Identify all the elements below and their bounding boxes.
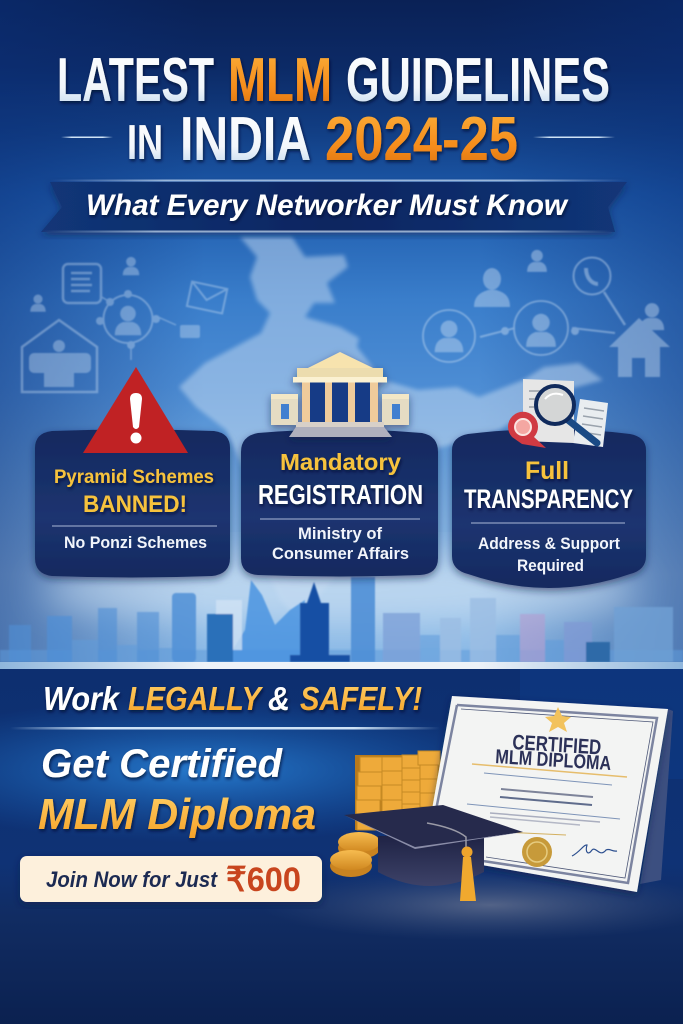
price: ₹600 [226,861,301,899]
panel: pyramid schemes banned [35,367,230,578]
icon: coins [330,832,380,877]
certificate title [495,731,612,775]
title: LATEST [57,46,214,115]
background [0,0,683,668]
icon: connectors [480,328,615,337]
panel: mandatory registration [241,352,438,576]
icon: manager [474,268,510,307]
icon: graduation cap [344,805,523,901]
slogan: SAFELY! [300,680,422,717]
slogan: & [268,680,290,717]
card background [35,430,230,578]
card note: Ministry of [298,524,382,543]
skyline: dark towers [207,582,610,662]
certificate rules [467,764,627,835]
card heading: REGISTRATION [258,479,423,510]
subtitle ribbon [41,180,627,232]
icon: small manager [527,250,547,272]
card heading: Pyramid Schemes [54,467,214,488]
card note [478,534,620,575]
icon: house [609,318,670,377]
title: IN [127,116,163,170]
icon: house with team [22,320,97,392]
icon: envelope [187,282,227,313]
icon: magnifier with documents [508,379,608,448]
skyline: lower haze buildings [0,635,683,662]
card heading: Full [525,457,569,485]
map of India [179,237,603,620]
skyline: pale towers [216,598,673,662]
title: INDIA [180,105,311,174]
card heading: Mandatory [280,449,401,475]
title side rule right [533,136,615,138]
certificate back [640,709,673,884]
icon: star [545,707,571,732]
lower section background [0,662,683,1024]
title side rule left [61,136,113,138]
certificate sheet [424,696,668,892]
icon: parcel [180,325,200,338]
card heading [54,467,214,518]
icon: person in circle [96,290,176,360]
certificate title: MLM DIPLOMA [495,746,612,775]
icon: person behind house [640,303,664,330]
slogan [43,680,422,717]
heading: get certified [38,742,316,839]
tassel [427,823,476,901]
certificate title: CERTIFIED [512,731,602,759]
certificate border [457,705,657,883]
certificate seal [522,837,552,867]
icon: person circle right [514,301,568,355]
card heading: BANNED! [83,491,187,518]
title [57,46,610,174]
icon: far person [30,295,46,312]
price button [20,856,322,902]
slogan: LEGALLY [128,680,264,717]
panel: full transparency [452,379,646,588]
icon: small person [123,257,139,275]
slogan underline [10,727,440,730]
icon: phone circle [574,258,625,325]
card note [272,524,409,563]
certificate [424,696,673,892]
icon: document [63,264,101,303]
card background [241,430,438,576]
title: MLM [228,46,332,115]
title: 2024-25 [325,105,518,174]
faint network icons right [423,250,670,377]
heading: get certified: MLM Diploma [38,790,316,839]
card note: Address & Support [478,534,620,553]
icon: government building [271,352,409,437]
card note: Required [517,556,584,575]
card heading: TRANSPARENCY [464,484,633,514]
icon: person circle left [423,310,475,362]
card note: Consumer Affairs [272,544,409,563]
certificate signature [572,845,617,856]
faint network icons left [22,257,227,392]
card note: No Ponzi Schemes [64,533,207,552]
button text: Join Now for Just [46,867,219,892]
slogan: Work [43,680,121,717]
subtitle text: What Every Networker Must Know [86,189,569,222]
skyline [0,577,683,662]
skyline: mid towers [9,577,375,662]
heading: get certified: Get Certified [41,742,284,786]
card background [452,429,646,588]
card heading [258,449,423,510]
icon: gold stacks [355,751,440,830]
card heading [464,457,633,514]
icon: warning triangle [83,367,188,453]
